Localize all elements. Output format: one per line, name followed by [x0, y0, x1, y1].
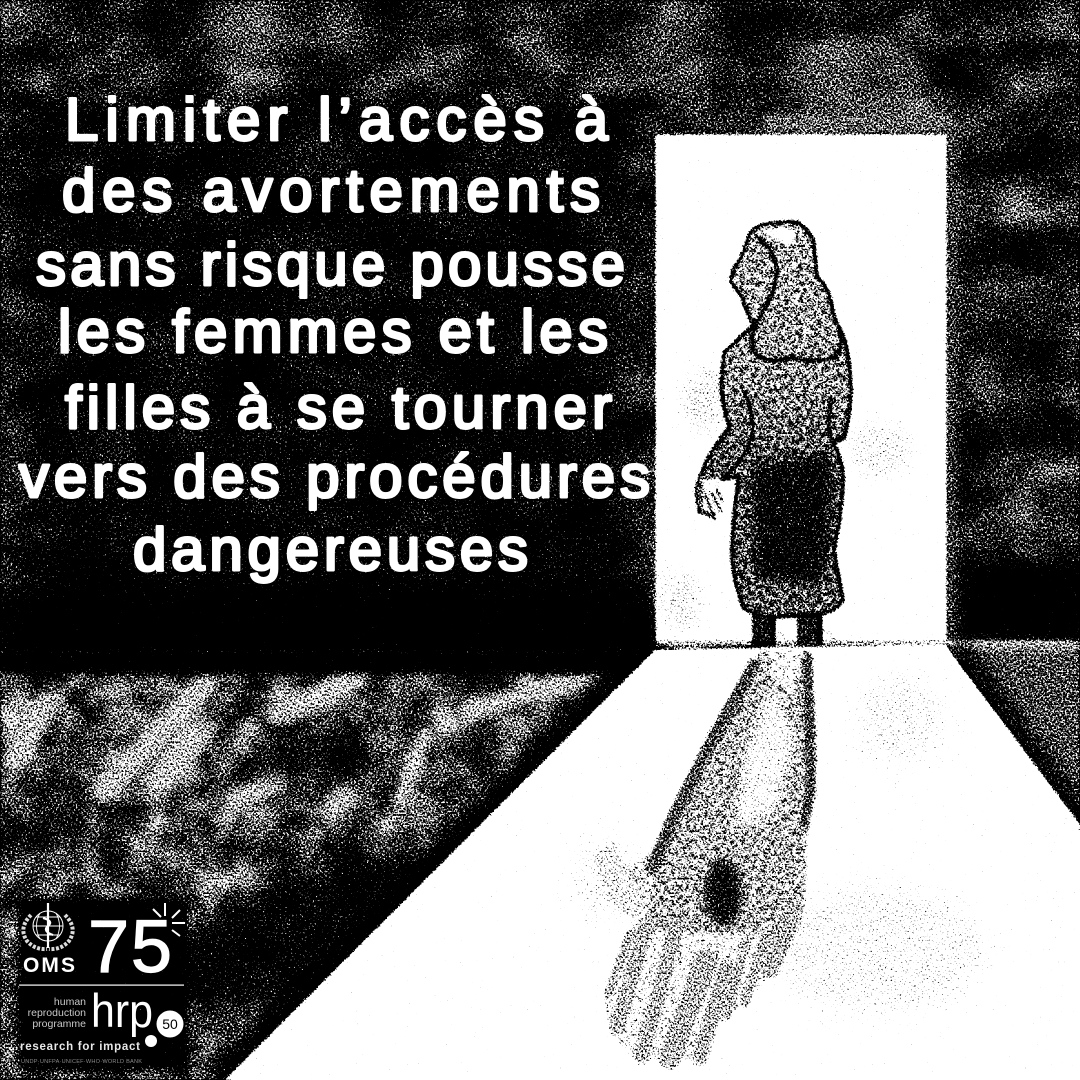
programme name [28, 996, 86, 1030]
light floor [225, 645, 1080, 1080]
right floor mottled corner [945, 636, 1080, 835]
bright strip at wall base [945, 636, 1080, 650]
hrp wordmark: hrp [91, 984, 153, 1037]
floor bottom edge cleanup [232, 1075, 1080, 1080]
dark patch on skirt [753, 453, 830, 583]
speck patch right of figure [844, 418, 916, 482]
texture rect [593, 650, 820, 1060]
legs [752, 612, 823, 647]
dark patch left [0, 808, 90, 852]
badge circle [156, 1010, 184, 1038]
shadow gap between the legs [767, 648, 803, 697]
shadow finger streaks [608, 913, 793, 1058]
glow along door right [944, 130, 958, 635]
hair inner lines [752, 236, 841, 361]
floor right edge cleanup [1075, 830, 1080, 1080]
floor speck patch left [570, 840, 650, 920]
headline line 5: filles à se tourner [65, 374, 612, 441]
badge number: 50 [162, 1016, 178, 1032]
headline line 2: des avortements [62, 157, 600, 224]
white doorway [656, 135, 946, 645]
bright diagonal streaks [15, 678, 590, 802]
shadow dark core [705, 860, 742, 927]
shadow body [643, 650, 817, 933]
headline line 3: sans risque pousse [36, 231, 625, 298]
cast shadow [593, 648, 820, 1060]
logo divider [19, 984, 184, 986]
darkened panel behind the headline [30, 110, 630, 630]
OMS wordmark: OMS [23, 954, 75, 977]
50 badge [156, 1010, 184, 1038]
darkest lower right wall [965, 565, 1080, 635]
streak strokes [617, 927, 647, 1027]
icon: WHO emblem [23, 903, 73, 949]
darkest band under the headline [0, 590, 660, 668]
light hand [703, 477, 723, 513]
speck patch left of figure [679, 364, 731, 436]
headline [19, 86, 650, 583]
shoe curves [777, 630, 835, 644]
texture rect [693, 220, 853, 620]
staff and serpent [43, 903, 53, 948]
dark band along the floor edge [225, 645, 660, 1080]
logo backing [20, 900, 186, 1068]
body fill [695, 221, 851, 617]
darker floor patches [180, 820, 444, 1038]
threshold line [656, 640, 956, 645]
shadow hand [593, 840, 643, 923]
research for impact tagline: research for impact [20, 1041, 140, 1053]
body chunky texture [693, 220, 853, 620]
floor speck patch near lower right [770, 880, 990, 1020]
shadow dark left edge [650, 660, 757, 873]
shadow lighter centre [737, 683, 793, 827]
icon: sun rays [153, 903, 185, 936]
partner logos [19, 903, 185, 1065]
sponsors line: UNDP·UNFPA·UNICEF·WHO·WORLD BANK [21, 1059, 142, 1065]
chalk patch top centre [595, 30, 665, 90]
fingers [696, 477, 723, 520]
woman silhouette [693, 220, 853, 647]
headline line 6: vers des procédures [19, 443, 650, 510]
shadow dark right edge [803, 653, 812, 827]
laurel left [23, 915, 47, 949]
floor grain base [0, 648, 654, 1080]
dark top of floor [0, 650, 660, 672]
human: human [54, 996, 86, 1008]
globe [33, 911, 63, 941]
dark patch centre [260, 727, 380, 783]
WHO 75 numeral: 75 [88, 905, 172, 988]
corner fill [945, 640, 1080, 830]
globe meridians [33, 911, 63, 941]
glow along door top [760, 112, 955, 134]
headline line 1: Limiter l’accès à [65, 86, 609, 153]
dark leg edges [753, 613, 820, 645]
shadow chunky texture [593, 650, 820, 1060]
headline line 7: dangereuses [133, 516, 528, 583]
arm inner lines [720, 390, 833, 478]
hrp dot [145, 1035, 157, 1047]
headline line 4: les femmes et les [58, 298, 608, 365]
laurel right [49, 915, 73, 949]
wall charcoal mottling [0, 0, 1080, 660]
floor speck patch upper right [850, 670, 950, 770]
reproduction: reproduction [28, 1007, 86, 1019]
light hood top [762, 228, 797, 247]
streak group [105, 685, 205, 790]
top-left chalk patch [200, 4, 380, 56]
left floor with diagonal chalk streaks [0, 648, 654, 1080]
light chalk patch above door [790, 33, 930, 117]
speck patch door base [656, 566, 704, 634]
darker edge [945, 650, 1080, 835]
programme: programme [32, 1018, 86, 1030]
body outline [700, 221, 851, 617]
